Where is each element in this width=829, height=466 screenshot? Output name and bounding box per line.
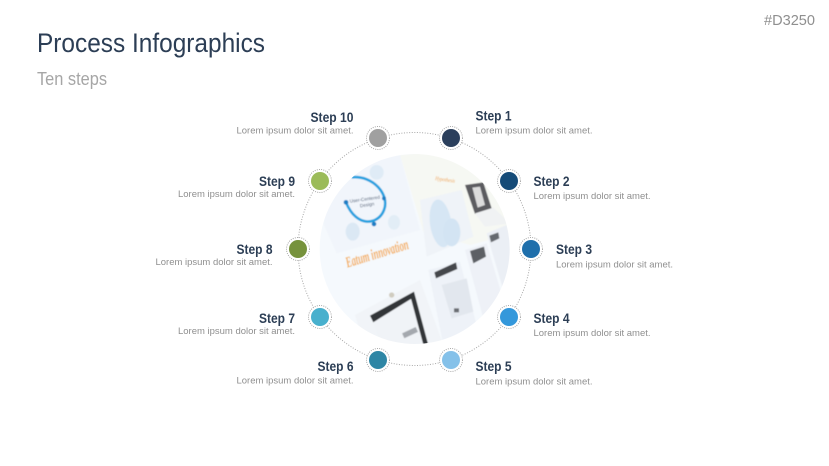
step 3: Lorem ipsum dolor sit amet.	[556, 260, 673, 270]
step 10: Step 10	[310, 110, 354, 125]
step 10: Lorem ipsum dolor sit amet.	[236, 126, 354, 136]
step 2	[498, 170, 650, 202]
step 3	[520, 238, 673, 270]
step 6: Step 6	[318, 359, 354, 374]
subtitle: Ten steps	[37, 69, 107, 89]
step 5: Lorem ipsum dolor sit amet.	[476, 376, 592, 388]
step 5	[440, 348, 592, 388]
step 8	[156, 238, 310, 268]
step 6	[236, 348, 390, 386]
step 2: Step 2	[534, 174, 570, 189]
central photo: Design	[360, 201, 375, 208]
step 5: Step 5	[476, 359, 512, 374]
document code: #D3250	[764, 12, 815, 29]
step 9: Lorem ipsum dolor sit amet.	[178, 189, 295, 200]
central photo: Eatum innovation	[343, 236, 411, 272]
step 9: Step 9	[259, 174, 295, 189]
step 9	[178, 170, 332, 200]
step 7: Step 7	[259, 311, 295, 326]
dotted ring	[298, 132, 531, 366]
step 2: Lorem ipsum dolor sit amet.	[534, 191, 650, 202]
step 3: Step 3	[556, 242, 592, 257]
step 4: Lorem ipsum dolor sit amet.	[534, 328, 650, 339]
central photo: Hypothesis	[434, 176, 456, 185]
step 1: Lorem ipsum dolor sit amet.	[476, 126, 592, 136]
step 6: Lorem ipsum dolor sit amet.	[236, 376, 354, 386]
step 10	[236, 110, 390, 150]
step 4	[498, 306, 650, 339]
step 1	[440, 108, 592, 150]
title: Process Infographics	[37, 28, 265, 58]
step 8: Lorem ipsum dolor sit amet.	[156, 257, 272, 268]
step 1: Step 1	[476, 108, 512, 124]
central photo	[320, 154, 510, 344]
step 8: Step 8	[236, 242, 273, 257]
central photo: User-Centered	[349, 195, 381, 204]
step 4: Step 4	[534, 311, 570, 326]
step 7: Lorem ipsum dolor sit amet.	[178, 326, 295, 337]
step 7	[178, 306, 332, 337]
